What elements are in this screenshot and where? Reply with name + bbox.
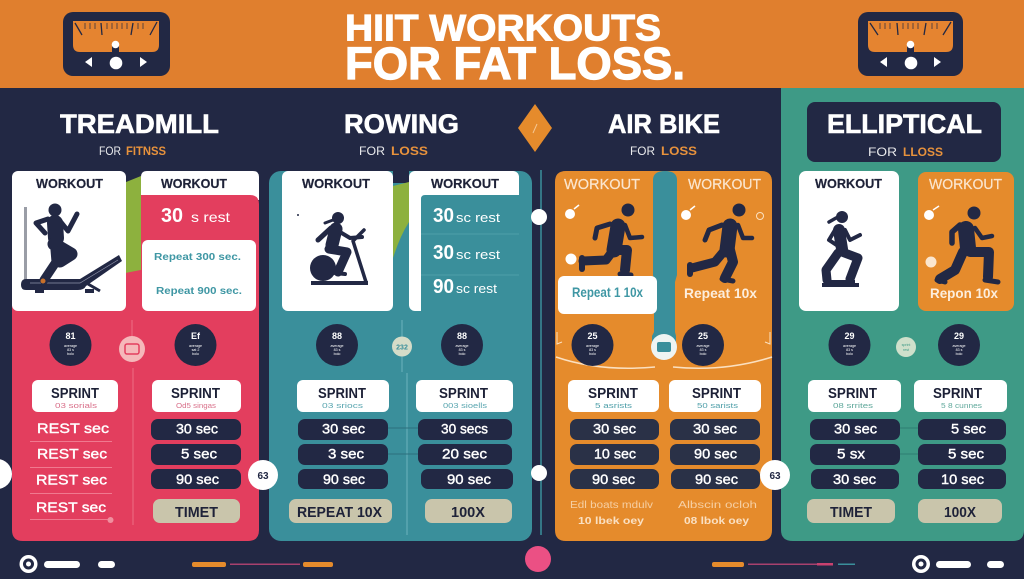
title: HIIT WORKOUTS	[345, 8, 661, 48]
connector lines	[388, 428, 418, 454]
time rows left: 5 sx	[837, 446, 865, 462]
heading: air bike: AIR BIKE	[608, 109, 720, 139]
total button right	[918, 499, 1002, 523]
time rows left: 30 sec	[593, 420, 636, 436]
total button left	[807, 499, 895, 523]
sprint header left	[32, 380, 118, 412]
footer decoration right	[712, 555, 1004, 573]
badge: air bike timer left: 83 s	[589, 348, 596, 352]
icon: connector badge two: 63	[769, 471, 781, 482]
sprint header right	[914, 380, 1007, 412]
time rows left: 30 sec	[833, 471, 876, 487]
badge: treadmill timer right: Ef	[191, 331, 201, 341]
icon: treadmill centre marker	[119, 320, 145, 525]
total button left: TIMET	[830, 504, 872, 521]
note left: 10 lbek oey	[578, 515, 644, 527]
card: elliptical intervals: Repon 10x	[930, 285, 998, 301]
icon: left scale gauge	[63, 12, 170, 76]
total button	[425, 499, 512, 523]
green column background	[781, 88, 1024, 541]
rest list: REST sec	[36, 472, 107, 488]
heading: treadmill: TREADMILL	[60, 109, 219, 139]
card: air bike figure right	[681, 177, 764, 301]
callout: repeat left	[558, 276, 657, 314]
card: treadmill figure	[12, 171, 126, 311]
heading: rowing: FOR	[359, 146, 385, 158]
repeat button	[289, 499, 392, 523]
sprint header right: SPRINT	[692, 385, 741, 402]
callout: repeat left: Repeat 1 10x	[572, 284, 643, 300]
badge: air bike timer right: 25	[698, 331, 708, 341]
badge: air bike timer right: bolo	[700, 352, 706, 356]
badge: treadmill timer right: sat 2	[192, 348, 199, 352]
badge: treadmill timer left	[50, 324, 92, 366]
badge: air bike timer left: average	[586, 344, 599, 348]
card: rowing intervals: sc rest	[456, 210, 500, 225]
time rows left: 30 sec	[322, 420, 365, 436]
card: treadmill intervals: WORKOUT	[161, 176, 227, 191]
card: treadmill figure: WORKOUT	[36, 176, 103, 191]
badge: treadmill timer left: 83 s	[67, 348, 74, 352]
time rows right: 5 sec	[948, 446, 984, 462]
icon: pink dot	[525, 546, 551, 572]
heading: air bike: FOR	[630, 146, 655, 158]
badge: elliptical timer left: average	[843, 344, 856, 348]
heading: elliptical: LLOSS	[903, 147, 943, 159]
panel: rowing	[269, 171, 532, 541]
icon: centre diamond	[518, 104, 552, 152]
total button right: 100X	[944, 504, 976, 521]
heading: rowing: ROWING	[344, 109, 459, 139]
icon: air bike centre marker	[651, 334, 677, 360]
note left: Edl boats mdulv	[570, 500, 653, 511]
badge: elliptical timer right: 83 s	[956, 348, 963, 352]
sprint header left	[568, 380, 659, 412]
badge: treadmill timer left: 81	[65, 331, 76, 341]
card: air bike figure left	[564, 177, 642, 275]
card: air bike figure right: WORKOUT	[688, 177, 761, 193]
card: treadmill intervals: Repeat 900 sec.	[156, 285, 242, 297]
rest list: REST sec	[37, 446, 107, 462]
badge: rowing timer right: bolo	[459, 352, 465, 356]
sprint header left	[297, 380, 389, 412]
sprint header right: SPRINT	[439, 385, 488, 402]
rest list	[30, 420, 114, 523]
total button: TIMET	[175, 504, 218, 521]
badge: elliptical timer left: 29	[844, 331, 855, 341]
sprint header left: SPRINT	[828, 385, 877, 402]
badge: elliptical timer right: bolo	[956, 352, 962, 356]
heading: air bike: LOSS	[661, 146, 697, 158]
rest list: REST sec	[36, 499, 106, 515]
repeat button: REPEAT 10X	[297, 505, 382, 521]
badge: elliptical timer right	[938, 324, 980, 366]
badge: air bike timer right: average	[696, 344, 710, 348]
title: FOR FAT LOSS.	[345, 38, 685, 89]
time rows left: 3 sec	[328, 446, 364, 462]
sprint header right: Od5 singas	[176, 401, 216, 410]
icon: left edge tab	[0, 459, 12, 489]
note right: 08 lbok oey	[684, 515, 749, 527]
sprint header left: SPRINT	[51, 385, 99, 402]
card: elliptical intervals: WORKOUT	[929, 177, 1002, 193]
sprint header left: 03 sorials	[55, 401, 97, 410]
time rows left: 30 sec	[834, 420, 877, 436]
badge: treadmill timer left: average	[64, 344, 77, 348]
sprint header left: SPRINT	[318, 385, 366, 402]
card: elliptical intervals	[918, 172, 1014, 311]
sprint header right: 5 8 cunnes	[941, 401, 982, 410]
sprint header right	[416, 380, 513, 412]
time rows left: 90 sec	[592, 471, 635, 487]
badge: elliptical timer left: bolo	[846, 352, 853, 356]
time rows left: 10 sec	[594, 446, 636, 462]
sprint header left: SPRINT	[588, 385, 638, 402]
icon: elliptical centre marker	[896, 337, 916, 357]
time rows right	[418, 419, 513, 489]
note right: Albscin ocloh	[678, 500, 757, 511]
sprint header left	[808, 380, 901, 412]
note right	[678, 500, 757, 527]
time rows right: 90 sec	[447, 471, 491, 487]
badge: rowing timer left: bolo	[334, 352, 340, 356]
title	[345, 8, 685, 89]
rest list: REST sec	[37, 420, 109, 436]
card: treadmill intervals: s rest	[191, 209, 230, 225]
card: rowing figure	[282, 171, 393, 311]
time rows right: 30 sec	[176, 420, 218, 436]
panel: air bike	[555, 171, 772, 541]
badge: air bike timer right	[682, 324, 724, 366]
badge: treadmill timer right	[174, 324, 216, 366]
heading: treadmill: FITNSS	[126, 146, 166, 158]
footer decoration centre	[192, 562, 333, 567]
total button	[153, 499, 240, 523]
card: elliptical figure	[799, 171, 899, 311]
icon: connector badge two	[760, 460, 790, 490]
badge: air bike timer left: 25	[587, 331, 598, 341]
heading: rowing	[344, 109, 459, 158]
time rows right: 90 sec	[695, 471, 738, 487]
badge: rowing timer left: 88	[332, 331, 342, 341]
badge: rowing timer left: average	[330, 344, 344, 348]
card: rowing intervals: sc rest	[456, 247, 500, 262]
sprint header right	[669, 380, 761, 412]
badge: treadmill timer right: average	[189, 344, 202, 348]
time rows right	[151, 419, 241, 489]
badge: treadmill timer right: bolo	[192, 352, 199, 356]
connector lines	[900, 428, 918, 454]
footer decoration left	[20, 555, 115, 573]
sprint header right: SPRINT	[171, 385, 220, 402]
badge: rowing timer left	[316, 324, 358, 366]
badge: air bike timer left	[572, 324, 614, 366]
badge: elliptical timer right: average	[952, 344, 966, 348]
time rows right: 5 sec	[951, 420, 986, 436]
sprint header left: 03 sriocs	[322, 401, 363, 410]
time rows right: 90 sec	[176, 471, 219, 487]
time rows right	[918, 419, 1006, 489]
note left	[570, 500, 653, 527]
card: elliptical figure: WORKOUT	[815, 176, 882, 191]
sprint header right: 003 sioells	[443, 401, 487, 410]
time rows left	[298, 419, 388, 489]
card: rowing intervals: sc rest	[456, 281, 497, 296]
badge: elliptical timer left	[828, 324, 870, 366]
sprint header right: SPRINT	[933, 385, 982, 402]
time rows right: 30 secs	[441, 420, 488, 436]
sprint header left: 08 srrites	[833, 401, 873, 410]
badge: treadmill timer left: bolo	[67, 352, 74, 356]
heading: elliptical: FOR	[868, 147, 897, 159]
heading: treadmill	[60, 109, 219, 158]
card: rowing intervals: WORKOUT	[431, 176, 499, 191]
card: rowing intervals: 30	[433, 205, 454, 227]
time rows right	[670, 419, 760, 489]
badge: air bike timer right: 83 s	[700, 348, 707, 352]
panel: treadmill	[12, 171, 259, 541]
heading: elliptical	[807, 102, 1001, 162]
time rows right: 10 sec	[941, 471, 984, 487]
time rows left	[570, 419, 659, 489]
sprint header left: 5 asrists	[595, 401, 632, 410]
sprint header right: 50 sarists	[697, 401, 738, 410]
heading: treadmill: FOR	[99, 146, 121, 158]
badge: rowing timer right: average	[456, 344, 468, 348]
time rows left: 90 sec	[323, 471, 365, 487]
card: air bike figure left: WORKOUT	[564, 177, 640, 193]
heading: air bike	[608, 109, 720, 158]
time rows right: 5 sec	[181, 446, 217, 462]
icon: connector badge one	[248, 460, 278, 490]
badge: rowing timer left: 83 s	[334, 348, 341, 352]
badge: rowing timer right: 83 s	[459, 348, 466, 352]
time rows right: 30 sec	[693, 420, 737, 436]
badge: elliptical timer left: 83 s	[846, 348, 853, 352]
timeline rail	[531, 170, 547, 535]
card: air bike figure right: Repeat 10x	[684, 285, 757, 301]
card: treadmill intervals: 30	[161, 205, 183, 227]
icon: rowing centre marker	[392, 320, 412, 535]
card: rowing intervals: 90	[433, 276, 454, 298]
card: rowing intervals	[409, 171, 519, 311]
badge: rowing timer right: 88	[457, 331, 467, 341]
icon: connector badge one: 63	[257, 471, 269, 482]
time rows right: 20 sec	[442, 446, 487, 462]
time rows right: 90 sec	[694, 446, 737, 462]
card: treadmill intervals	[141, 171, 259, 311]
header band	[0, 0, 1024, 89]
panel: elliptical	[799, 171, 1014, 523]
icon: elliptical centre marker: rest	[903, 348, 909, 352]
icon: elliptical centre marker: sprint	[902, 343, 910, 347]
badge: rowing timer right	[441, 324, 483, 366]
heading: elliptical: ELLIPTICAL	[827, 109, 982, 139]
icon: right scale gauge	[858, 12, 963, 76]
total button: 100X	[451, 504, 485, 521]
card: rowing intervals: 30	[433, 242, 454, 264]
badge: air bike timer left: bolo	[589, 352, 596, 356]
card: rowing figure: WORKOUT	[302, 176, 370, 191]
time rows left	[810, 419, 900, 489]
heading: rowing: LOSS	[391, 146, 428, 158]
icon: rowing centre marker: 232	[396, 344, 408, 352]
sprint header right	[152, 380, 241, 412]
card: treadmill intervals: Repeat 300 sec.	[154, 251, 241, 263]
badge: elliptical timer right: 29	[954, 331, 964, 341]
